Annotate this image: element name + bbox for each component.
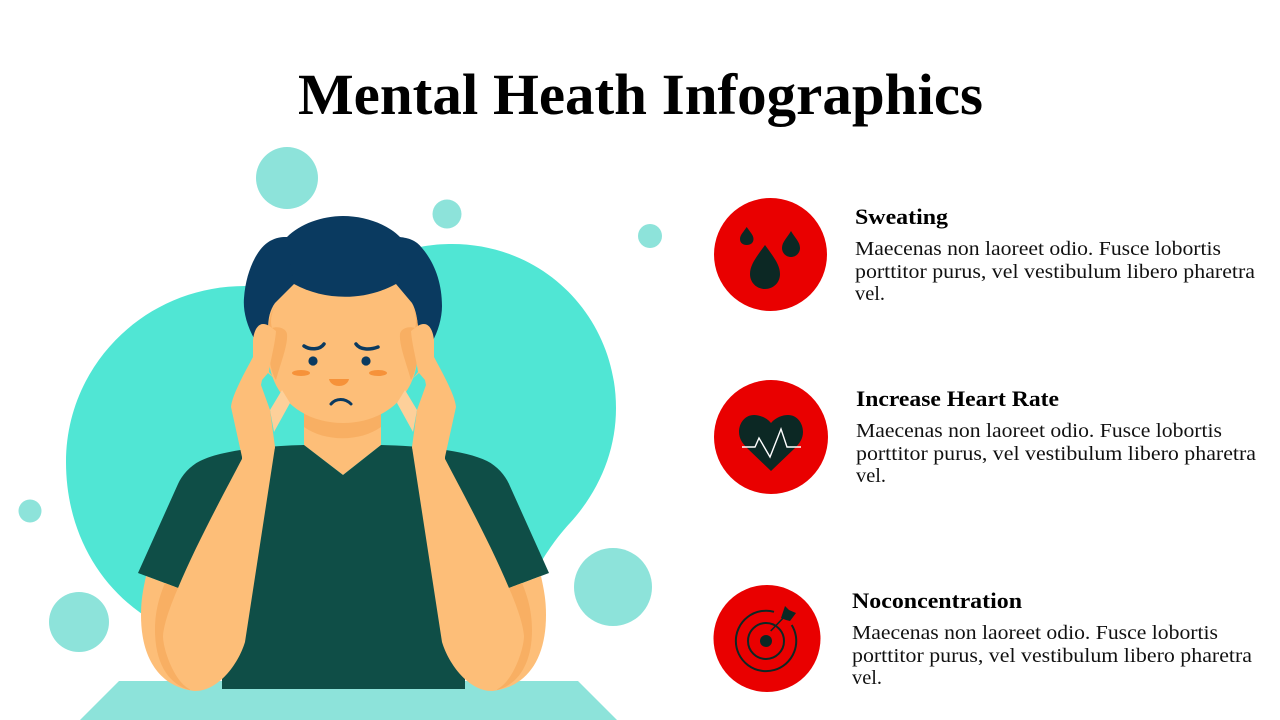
- text: sweating description: vel.: [855, 283, 885, 305]
- hair back: [244, 216, 442, 342]
- title: Mental Heath Infographics: [298, 62, 983, 127]
- item: increase heart rate: [714, 380, 1256, 494]
- text: noconcentration description: porttitor purus, vel vestibulum libero pharetra: [852, 645, 1252, 667]
- table: [80, 681, 617, 720]
- text: noconcentration description: vel.: [852, 667, 882, 689]
- text: noconcentration description: [852, 622, 1252, 689]
- icon: heart with pulse: [714, 380, 828, 494]
- neck: [304, 405, 381, 475]
- hairline: [290, 262, 400, 297]
- eyes: [308, 356, 371, 366]
- heading: noconcentration: Noconcentration: [852, 588, 1023, 613]
- upper arm shadow: [155, 583, 190, 690]
- forearm: [163, 447, 275, 691]
- text: sweating description: Maecenas non laoreet odio. Fusce lobortis: [855, 238, 1221, 260]
- face shadow right: [400, 306, 418, 380]
- text: heart rate description: [856, 420, 1256, 487]
- text: heart rate description: Maecenas non laoreet odio. Fusce lobortis: [856, 420, 1222, 442]
- shirt: [138, 445, 549, 689]
- right arm: [397, 324, 546, 691]
- decorative bubbles: [18, 147, 662, 652]
- eyebrows: [304, 344, 378, 349]
- upper arm right: [487, 576, 546, 691]
- mouth: [331, 400, 351, 404]
- item: sweating: [714, 198, 1255, 311]
- hand right: [411, 324, 456, 470]
- cheeks: [292, 370, 387, 376]
- text: heart rate description: porttitor purus, vel vestibulum libero pharetra: [856, 443, 1256, 465]
- face: [268, 284, 418, 423]
- heading: sweating: Sweating: [855, 204, 949, 229]
- background blob: [66, 244, 616, 640]
- left arm: [141, 324, 290, 691]
- face shadow left: [268, 306, 287, 380]
- icon: target with arrow: [714, 585, 820, 692]
- wrist highlight: [270, 390, 290, 432]
- text: noconcentration description: Maecenas non laoreet odio. Fusce lobortis: [852, 622, 1218, 644]
- forearm right: [412, 447, 524, 691]
- upper arm: [141, 576, 200, 691]
- illustration: stressed man: [18, 147, 662, 720]
- text: sweating description: [855, 238, 1255, 305]
- item: noconcentration: [714, 585, 1252, 692]
- heading: increase heart rate: Increase Heart Rate: [856, 386, 1059, 411]
- icon: sweat drops: [714, 198, 827, 311]
- text: heart rate description: vel.: [856, 465, 886, 487]
- neck shadow: [304, 405, 381, 438]
- wrist highlight right: [397, 390, 417, 432]
- upper arm shadow right: [497, 583, 532, 690]
- hand: [231, 324, 276, 470]
- nose: [329, 379, 349, 386]
- text: sweating description: porttitor purus, vel vestibulum libero pharetra: [855, 261, 1255, 283]
